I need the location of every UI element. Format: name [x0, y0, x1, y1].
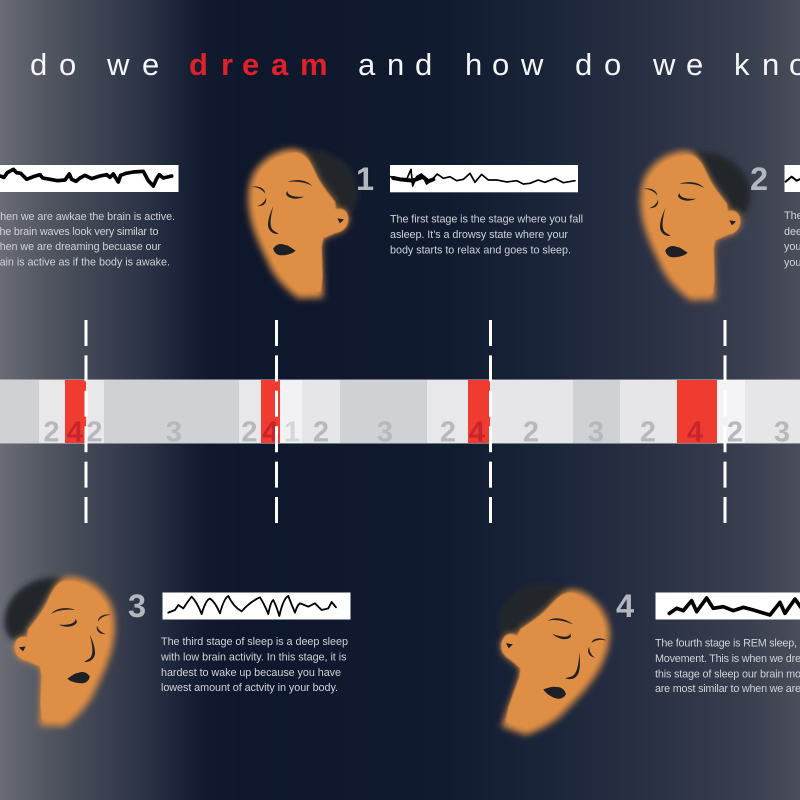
stage numbers on the timeline: 3 — [774, 416, 790, 448]
stage numbers on the timeline: 4 — [67, 416, 83, 448]
awake brain wave — [0, 165, 178, 192]
stage numbers on the timeline: 2 — [313, 416, 329, 448]
sleep stage timeline bar — [0, 380, 800, 448]
title: we — [106, 47, 159, 82]
icon: sleeping head 2 — [640, 151, 751, 300]
panel: stage 3 — [4, 577, 350, 726]
dashed REM marker lines — [86, 320, 725, 524]
stage 3 brain wave — [162, 592, 350, 620]
stage numbers on the timeline — [43, 416, 790, 448]
stage 4 description: this stage of sleep our brain mo — [655, 668, 800, 680]
icon: sleeping head 1 — [248, 149, 359, 298]
stage numbers on the timeline: 1 — [284, 416, 300, 448]
stage 3 description: hardest to wake up because you have — [161, 667, 341, 679]
stage numbers on the timeline: 2 — [43, 416, 60, 448]
stage numbers on the timeline: 2 — [727, 416, 743, 448]
stage numbers on the timeline: 2 — [86, 416, 103, 448]
stage numbers on the timeline: 3 — [166, 416, 182, 448]
stage number 4: 4 — [616, 588, 634, 624]
stage numbers on the timeline: 3 — [588, 416, 604, 448]
stage number 1: 1 — [356, 161, 374, 197]
panel: awake stage — [0, 165, 178, 268]
stage 3 description: lowest amount of actvity in your body. — [161, 682, 338, 694]
stage 2 description — [784, 210, 800, 269]
stage 4 brain wave — [656, 592, 800, 620]
awake description — [0, 211, 175, 268]
stage 4 description: are most similar to when we are — [655, 683, 800, 695]
stage 1 description: body starts to relax and goes to sleep. — [390, 244, 571, 256]
title: we — [652, 47, 703, 82]
stage numbers on the timeline: 4 — [687, 416, 703, 448]
stage 4 description — [655, 638, 800, 695]
stage number 3: 3 — [128, 588, 146, 624]
stage 1 description: asleep. It’s a drowsy state where your — [390, 229, 568, 241]
stage numbers on the timeline: 2 — [440, 416, 456, 448]
stage 1 description: The first stage is the stage where you fall — [390, 214, 583, 226]
panel: stage 4 — [467, 570, 800, 751]
stage number 2: 2 — [750, 161, 768, 197]
icon: sleeping head 4 — [467, 570, 622, 751]
title: and — [358, 47, 432, 82]
stage 3 description — [160, 636, 348, 694]
stage numbers on the timeline: 2 — [640, 416, 656, 448]
stage 2 brain wave — [784, 165, 800, 192]
stage 4 description: The fourth stage is REM sleep, — [655, 638, 797, 650]
panel: stage 2 — [640, 151, 800, 300]
stage 1 brain wave — [390, 165, 578, 192]
stage numbers on the timeline: 2 — [241, 416, 258, 448]
icon: sleeping head 3 — [4, 577, 115, 726]
title: how — [465, 47, 544, 82]
stage numbers on the timeline: 4 — [469, 416, 485, 448]
panel: stage 1 — [248, 149, 583, 298]
title: do — [575, 47, 621, 82]
stage numbers on the timeline: 3 — [377, 416, 393, 448]
stage 1 description — [390, 214, 583, 256]
stage numbers on the timeline: 2 — [523, 416, 539, 448]
stage 4 description: Movement. This is when we dre — [655, 653, 800, 665]
title: do — [30, 47, 76, 82]
stage numbers on the timeline: 4 — [262, 416, 279, 448]
stage 3 description: with low brain activity. In this stage, it is — [160, 652, 347, 664]
title: dream — [189, 47, 328, 82]
stage 3 description: The third stage of sleep is a deep sleep — [161, 636, 348, 648]
